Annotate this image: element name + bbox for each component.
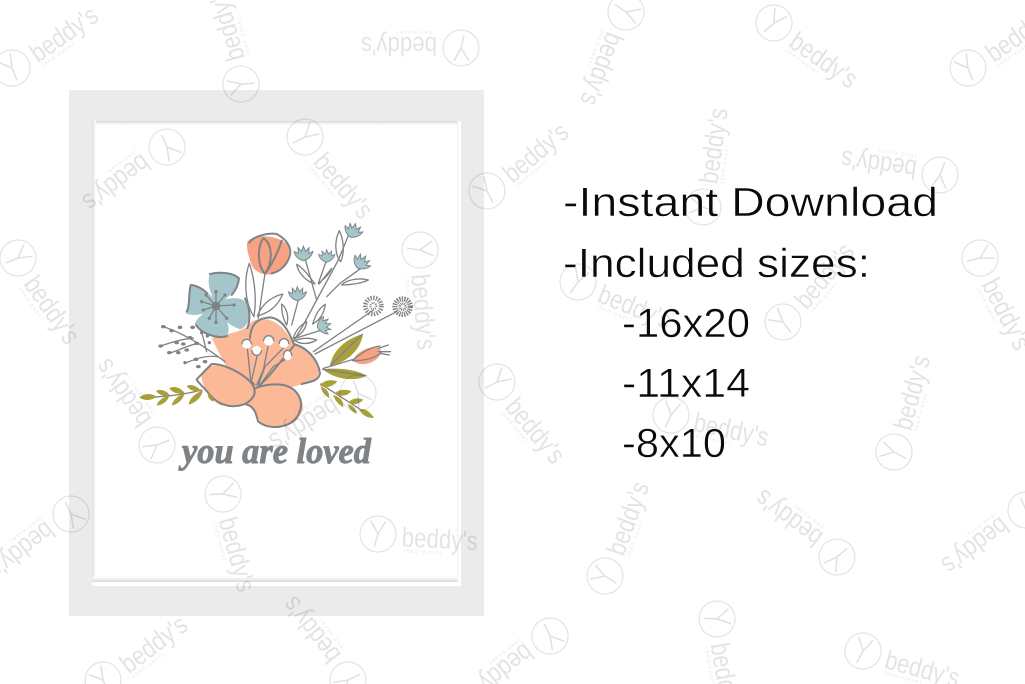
watermark 16: beddy's (888, 352, 936, 433)
watermark 24: (bed-ease) (403, 548, 443, 556)
watermark 1 (0, 0, 105, 94)
watermark 17: beddy's (18, 270, 86, 350)
watermark 12: (bed-ease) (595, 304, 634, 324)
watermark 23: beddy's (213, 514, 261, 595)
watermark 11: beddy's (839, 144, 919, 185)
watermark 5 (279, 112, 383, 226)
watermark 4: beddy's (77, 148, 156, 218)
watermark 25: (bed-ease) (132, 651, 167, 680)
watermark 25: beddy's (114, 609, 193, 679)
watermark 15 (649, 394, 773, 454)
watermark 1: (bed-ease) (41, 41, 77, 69)
line: 11x14: -11x14 (622, 360, 750, 406)
watermark 18: beddy's (405, 273, 442, 351)
watermark 2 (196, 0, 264, 106)
watermark 20: beddy's (264, 391, 345, 457)
watermark 20: (bed-ease) (292, 391, 329, 417)
watermark 7: (bed-ease) (585, 29, 605, 69)
watermark 12 (554, 259, 677, 337)
watermark 5: beddy's (307, 147, 379, 225)
picture frame (69, 90, 484, 616)
watermark 27: (bed-ease) (626, 519, 645, 558)
watermark 15: (bed-ease) (692, 433, 732, 447)
watermark 2: (bed-ease) (235, 16, 252, 55)
line: included sizes: -Included sizes: (563, 240, 870, 286)
olive sprig right (320, 380, 374, 418)
watermark 26 (272, 590, 374, 684)
watermark 6: beddy's (497, 117, 575, 189)
watermark 4 (76, 121, 192, 222)
watermark 7 (572, 0, 649, 112)
watermark 31 (695, 598, 752, 684)
watermark 22 (0, 488, 96, 590)
watermark 26: beddy's (276, 591, 347, 669)
watermark 32 (841, 629, 964, 684)
baby's breath buds (242, 336, 292, 385)
right olive leaves and peach bud (323, 334, 391, 379)
watermark 28: (bed-ease) (792, 502, 828, 531)
watermark 19: beddy's (89, 353, 157, 433)
watermark 27 (582, 476, 657, 599)
watermark 23 (200, 472, 266, 596)
watermark 30 (460, 610, 575, 684)
blue flower (186, 273, 250, 337)
watermark 28 (746, 482, 863, 582)
watermark 29: beddy's (936, 511, 1015, 581)
watermark 26: (bed-ease) (318, 617, 347, 652)
watermark 28: beddy's (749, 483, 828, 553)
line: 16x20: -16x20 (622, 300, 750, 346)
watermark 13 (758, 234, 862, 348)
watermark 21 (471, 357, 575, 471)
watermark 7: beddy's (574, 28, 630, 110)
watermark 10: (bed-ease) (719, 144, 731, 184)
watermark 16: (bed-ease) (913, 392, 929, 432)
tulip (247, 234, 290, 274)
watermark 3: (bed-ease) (395, 29, 435, 35)
watermark 9 (943, 0, 1025, 94)
watermark 8: (bed-ease) (784, 49, 820, 76)
watermark 18: (bed-ease) (403, 277, 413, 317)
watermark 29 (935, 484, 1025, 585)
watermark 27: beddy's (601, 478, 655, 559)
watermark 19 (85, 352, 183, 470)
watermark 13: (bed-ease) (810, 280, 840, 314)
watermark 19: (bed-ease) (130, 380, 158, 416)
watermark 3: beddy's (361, 31, 437, 61)
watermark 8: beddy's (784, 26, 863, 94)
watermark 5: (bed-ease) (307, 165, 337, 199)
gray dotted sprig (158, 325, 225, 368)
main peach flower (197, 317, 320, 428)
watermark 12: beddy's (594, 279, 676, 335)
watermark 22: (bed-ease) (8, 515, 43, 544)
watermark 23: (bed-ease) (211, 522, 227, 562)
watermark 14 (955, 234, 1025, 356)
watermark 21: (bed-ease) (499, 410, 529, 444)
watermark 15: beddy's (691, 407, 772, 452)
watermark 11 (838, 142, 960, 195)
watermark 11: (bed-ease) (877, 147, 917, 159)
watermark 20 (263, 367, 383, 461)
small blue blossoms (289, 220, 374, 336)
watermark 13: beddy's (788, 237, 860, 315)
watermark 30: (bed-ease) (487, 637, 522, 666)
watermark 24: beddy's (401, 522, 479, 556)
watermark 29: (bed-ease) (962, 510, 997, 539)
product details list (563, 179, 938, 466)
watermark 17: (bed-ease) (17, 287, 45, 323)
watermark 25 (78, 605, 194, 684)
dandelion puffs (365, 298, 410, 314)
script caption: you are loved: you are loved (178, 431, 372, 471)
watermark 3 (361, 29, 479, 66)
watermark 4: (bed-ease) (103, 147, 138, 176)
watermark 21: beddy's (499, 392, 571, 470)
watermark 18 (400, 230, 447, 351)
watermark 6: (bed-ease) (515, 159, 549, 189)
watermark 10 (683, 105, 736, 227)
watermark 10: beddy's (693, 106, 734, 186)
floral bouquet illustration (139, 220, 410, 428)
olive sprig left (139, 385, 214, 406)
watermark 24 (359, 515, 479, 558)
watermark 17 (0, 233, 90, 351)
thin stems and outline leaves (246, 231, 397, 368)
watermark 8 (748, 0, 866, 96)
watermark 14: (bed-ease) (975, 287, 998, 325)
watermark 6 (462, 113, 576, 217)
watermark 16 (872, 351, 938, 474)
line: 8x10: -8x10 (622, 420, 726, 466)
line: instant download: -Instant Download (563, 179, 938, 225)
